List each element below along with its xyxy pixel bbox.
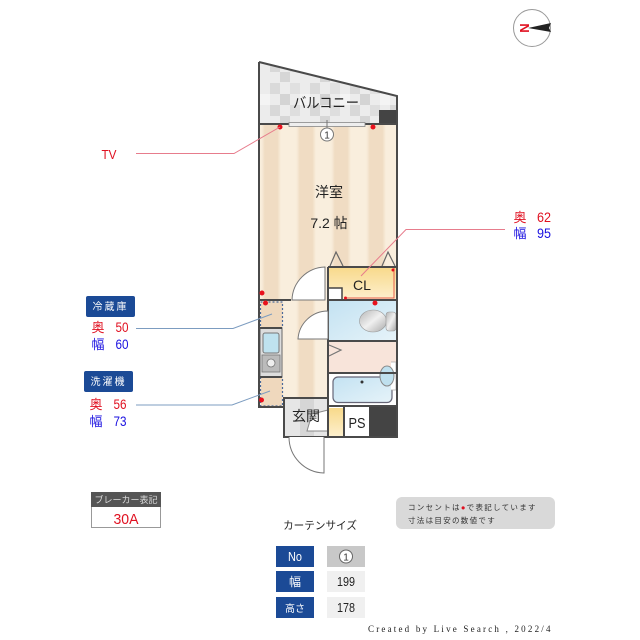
TV label: TV	[102, 147, 117, 162]
breaker panel: 30A	[114, 511, 138, 528]
curtain size table: 高さ	[285, 602, 305, 615]
curtain size table: 199	[337, 575, 355, 589]
TV label	[102, 127, 280, 162]
label: closet dimensions	[361, 209, 551, 276]
curtain size table: No	[288, 550, 302, 564]
label: washing machine: 洗濯機	[90, 375, 126, 388]
credit: Created by Live Search , 2022/4	[368, 624, 553, 634]
label: refrigerator: 60	[116, 336, 129, 352]
label: washing machine: 幅	[89, 414, 103, 429]
label: refrigerator	[86, 296, 272, 352]
label: washing machine: 56	[114, 396, 127, 412]
outlets	[259, 124, 394, 402]
toilet room	[328, 301, 396, 341]
fridge space	[260, 302, 282, 328]
icon: compass	[514, 10, 551, 46]
note box: 寸法は目安の数値です	[408, 515, 496, 525]
entrance: 玄関	[292, 408, 320, 424]
label: refrigerator: 冷蔵庫	[92, 300, 128, 313]
curtain size table: 幅	[289, 574, 301, 589]
closet CL	[328, 252, 396, 300]
bathroom	[328, 362, 396, 406]
door: toilet	[298, 311, 328, 339]
washroom	[328, 341, 396, 373]
closet CL: CL	[353, 277, 371, 293]
table title: カーテンサイズ	[283, 519, 357, 532]
washer space	[260, 377, 282, 406]
label: refrigerator: 50	[116, 319, 129, 335]
door: room	[292, 267, 325, 300]
yellow storage	[329, 408, 344, 437]
walls	[259, 62, 397, 437]
floor plan	[259, 62, 397, 473]
label: refrigerator: 奥	[91, 320, 105, 335]
curtain size table: 178	[337, 601, 355, 615]
label: washing machine	[84, 371, 270, 429]
window	[289, 120, 365, 128]
note box: コンセントは●で表記しています	[408, 502, 537, 512]
label: refrigerator: 幅	[91, 337, 105, 352]
icon: compass: N	[517, 23, 532, 33]
note box	[396, 497, 555, 529]
door: entrance	[289, 437, 324, 473]
balcony	[259, 62, 397, 124]
PS	[345, 408, 369, 437]
label: closet dimensions: 幅	[513, 226, 527, 241]
label: washing machine: 73	[114, 413, 127, 429]
label: washing machine: 奥	[89, 397, 103, 412]
entrance	[285, 399, 328, 436]
label: closet dimensions: 62	[537, 209, 551, 225]
breaker panel: ブレーカー表記	[94, 494, 158, 505]
curtain marker: 1	[324, 130, 330, 142]
breaker panel	[91, 492, 161, 528]
room: western room: 洋室	[315, 184, 343, 200]
curtain marker	[320, 128, 334, 142]
curtain size table: 1	[343, 552, 349, 564]
label: closet dimensions: 奥	[513, 210, 527, 225]
kitchen	[260, 328, 282, 377]
curtain size table	[276, 519, 365, 618]
shaft	[369, 406, 397, 437]
PS: PS	[348, 416, 366, 432]
room: western room: 7.2 帖	[310, 215, 348, 231]
label: closet dimensions: 95	[537, 225, 551, 241]
balcony: バルコニー	[293, 96, 359, 112]
hallway and kitchen floor	[260, 300, 328, 400]
room: western room	[260, 125, 396, 300]
